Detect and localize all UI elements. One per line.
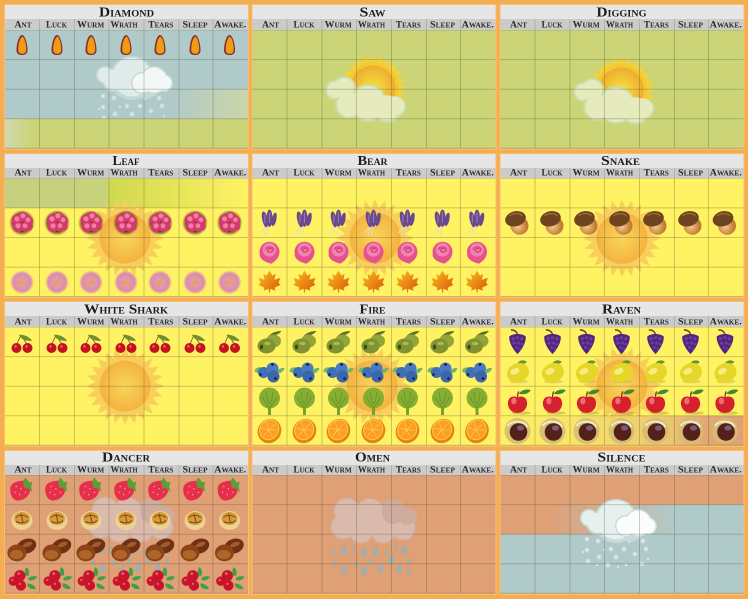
column headers: Tears bbox=[148, 169, 173, 179]
panel background: yellow bbox=[252, 178, 496, 297]
column headers: Wurm bbox=[325, 169, 352, 179]
icon: sun behind cloud bbox=[325, 54, 407, 123]
panel background: yellow with green band bbox=[5, 178, 248, 297]
column headers bbox=[500, 465, 744, 475]
icon row: strawberries bbox=[10, 477, 240, 501]
column headers: Tears bbox=[396, 20, 421, 30]
column headers: Sleep bbox=[430, 465, 456, 475]
panel: Dancer bbox=[4, 450, 249, 595]
column headers: Sleep bbox=[678, 20, 704, 30]
column headers: Wrath bbox=[606, 465, 633, 475]
column headers: Tears bbox=[396, 317, 421, 327]
column headers: Awake. bbox=[462, 465, 494, 475]
column headers: Wrath bbox=[110, 317, 138, 327]
panel background: blue to green bbox=[5, 30, 248, 120]
icon row: olives bbox=[258, 331, 489, 354]
panel background: yellow bbox=[500, 178, 744, 297]
title bbox=[5, 5, 248, 20]
panel: Silence bbox=[500, 450, 744, 595]
icon row: acorns bbox=[503, 209, 736, 235]
icon row: blueberries bbox=[254, 362, 492, 382]
column headers: Luck bbox=[542, 20, 563, 30]
icon row: cranberries bbox=[9, 567, 245, 591]
column headers: Tears bbox=[644, 20, 669, 30]
column headers: Luck bbox=[46, 317, 68, 327]
icon row: cherries bbox=[12, 335, 240, 353]
column headers: Awake. bbox=[462, 317, 494, 327]
title: Fire bbox=[360, 302, 386, 317]
column headers: Wurm bbox=[573, 317, 600, 327]
column headers: Wrath bbox=[110, 465, 138, 475]
column headers: Luck bbox=[294, 465, 315, 475]
column headers: Tears bbox=[396, 169, 421, 179]
column headers: Awake. bbox=[710, 317, 742, 327]
column headers: Wurm bbox=[77, 169, 105, 179]
icon row: maple leaves bbox=[258, 271, 488, 294]
panel: Leaf bbox=[4, 153, 249, 298]
title bbox=[500, 153, 744, 168]
column headers: Ant bbox=[262, 20, 279, 30]
column headers bbox=[252, 316, 496, 327]
icon: cloud with snow bbox=[96, 56, 173, 125]
column headers: Sleep bbox=[678, 465, 704, 475]
icon row: pale pink flowers bbox=[10, 270, 242, 294]
icon: sun bbox=[583, 199, 661, 277]
panel: Bear bbox=[252, 153, 496, 298]
column headers bbox=[5, 168, 248, 179]
column headers: Ant bbox=[262, 169, 279, 179]
season transition band bbox=[5, 89, 248, 148]
column headers bbox=[252, 168, 496, 179]
title: White Shark bbox=[84, 302, 168, 317]
column headers: Luck bbox=[294, 169, 315, 179]
icon: sun bbox=[86, 199, 164, 277]
column headers bbox=[252, 19, 496, 30]
column headers: Ant bbox=[262, 317, 279, 327]
title: Digging bbox=[596, 5, 646, 20]
panel background: green bbox=[252, 30, 496, 148]
column headers: Wrath bbox=[110, 20, 138, 30]
title bbox=[252, 153, 496, 168]
title bbox=[500, 450, 744, 465]
column headers: Luck bbox=[46, 465, 68, 475]
column headers: Luck bbox=[542, 465, 563, 475]
column headers: Ant bbox=[14, 465, 32, 475]
column headers: Wrath bbox=[606, 317, 633, 327]
column headers: Wurm bbox=[77, 317, 105, 327]
panel background: salmon bbox=[252, 475, 496, 593]
icon row: grapes bbox=[509, 330, 733, 354]
title bbox=[5, 450, 248, 465]
panel: Snake bbox=[500, 153, 744, 298]
panel: Saw bbox=[252, 4, 496, 150]
column headers: Ant bbox=[14, 317, 32, 327]
title: Dancer bbox=[102, 450, 151, 465]
column headers: Wurm bbox=[325, 20, 352, 30]
icon row: dark pink roses bbox=[9, 210, 242, 236]
icon row: chestnuts bbox=[504, 418, 738, 444]
column headers bbox=[500, 19, 744, 30]
column headers bbox=[500, 316, 744, 327]
icon row: lavender bbox=[260, 210, 485, 235]
column headers: Sleep bbox=[678, 317, 704, 327]
icon: sun bbox=[333, 347, 411, 425]
column headers: Wrath bbox=[358, 317, 385, 327]
column headers: Wurm bbox=[573, 465, 600, 475]
column headers: Awake. bbox=[710, 465, 742, 475]
panel: Fire bbox=[252, 301, 496, 448]
column headers: Wrath bbox=[606, 169, 633, 179]
title bbox=[252, 5, 496, 20]
column headers: Ant bbox=[510, 317, 527, 327]
icon: rain cloud bbox=[330, 498, 417, 575]
column headers: Awake. bbox=[462, 169, 494, 179]
column headers: Ant bbox=[14, 169, 32, 179]
column headers bbox=[5, 465, 248, 475]
column headers: Luck bbox=[46, 169, 68, 179]
column headers: Awake. bbox=[214, 465, 246, 475]
column headers: Sleep bbox=[182, 20, 208, 30]
panel: Digging bbox=[500, 4, 744, 150]
column headers bbox=[252, 465, 496, 475]
icon row: hazelnuts bbox=[7, 536, 246, 561]
title: Silence bbox=[598, 450, 646, 465]
column headers: Wurm bbox=[325, 317, 352, 327]
column headers: Ant bbox=[14, 20, 32, 30]
column headers: Sleep bbox=[678, 169, 704, 179]
icon row: artichokes bbox=[259, 388, 488, 415]
column headers: Wrath bbox=[110, 169, 138, 179]
column headers: Wrath bbox=[606, 20, 633, 30]
panel background: salmon to blue bbox=[500, 475, 744, 593]
title: Raven bbox=[602, 302, 642, 317]
icon row: amber drops bbox=[16, 35, 235, 55]
icon row: lemons bbox=[504, 360, 739, 386]
column headers: Tears bbox=[148, 317, 173, 327]
panel background: yellow bbox=[5, 327, 248, 445]
column headers: Awake. bbox=[710, 169, 742, 179]
icon: sun bbox=[583, 346, 661, 424]
panel: White Shark bbox=[4, 301, 249, 447]
panel background: green bbox=[500, 30, 744, 148]
column headers: Wurm bbox=[77, 465, 105, 475]
title bbox=[252, 302, 496, 317]
title bbox=[252, 450, 496, 465]
column headers: Tears bbox=[148, 465, 173, 475]
icon row: apples bbox=[508, 390, 738, 415]
column headers: Wurm bbox=[77, 20, 105, 30]
column headers: Tears bbox=[644, 465, 669, 475]
column headers: Luck bbox=[46, 20, 68, 30]
title: Bear bbox=[358, 153, 388, 168]
column headers: Awake. bbox=[710, 20, 742, 30]
title: Omen bbox=[355, 450, 391, 465]
column headers: Sleep bbox=[182, 317, 208, 327]
column headers: Wurm bbox=[573, 169, 600, 179]
column headers: Tears bbox=[644, 169, 669, 179]
panel: Diamond bbox=[4, 4, 249, 150]
title: Leaf bbox=[112, 153, 140, 168]
icon row: pink roses bbox=[260, 242, 487, 264]
title: Snake bbox=[601, 153, 640, 168]
column headers: Luck bbox=[294, 317, 315, 327]
title: Diamond bbox=[99, 5, 155, 20]
column headers: Wurm bbox=[573, 20, 600, 30]
column headers: Wurm bbox=[325, 465, 352, 475]
column headers: Sleep bbox=[430, 317, 456, 327]
column headers: Awake. bbox=[214, 317, 246, 327]
column headers: Sleep bbox=[430, 20, 456, 30]
panel background: salmon bbox=[5, 475, 248, 593]
column headers: Tears bbox=[396, 465, 421, 475]
panel background: yellow fading to salmon bbox=[500, 327, 744, 445]
column headers: Ant bbox=[510, 20, 527, 30]
column headers: Sleep bbox=[430, 169, 456, 179]
column headers bbox=[5, 316, 248, 327]
icon: rain cloud bbox=[88, 496, 175, 574]
column headers bbox=[500, 168, 744, 179]
column headers: Awake. bbox=[214, 169, 246, 179]
panel: Raven bbox=[500, 301, 744, 447]
icon row: orange slices bbox=[253, 414, 494, 448]
title bbox=[5, 302, 248, 317]
icon: sun bbox=[86, 347, 164, 425]
column headers: Wrath bbox=[358, 20, 385, 30]
panel: Omen bbox=[252, 450, 496, 595]
column headers: Tears bbox=[644, 317, 669, 327]
icon: sun behind cloud bbox=[573, 56, 655, 125]
column headers: Wrath bbox=[358, 169, 385, 179]
title bbox=[500, 302, 744, 317]
icon: cloud with snow bbox=[580, 499, 657, 568]
icon: sun bbox=[336, 199, 414, 277]
column headers: Ant bbox=[262, 465, 279, 475]
title: Saw bbox=[360, 5, 386, 20]
column headers: Luck bbox=[542, 317, 563, 327]
column headers: Luck bbox=[294, 20, 315, 30]
column headers: Sleep bbox=[182, 169, 208, 179]
column headers: Wrath bbox=[358, 465, 385, 475]
column headers: Luck bbox=[542, 169, 563, 179]
column headers: Ant bbox=[510, 169, 527, 179]
column headers: Awake. bbox=[214, 20, 246, 30]
title bbox=[5, 153, 248, 168]
column headers bbox=[5, 19, 248, 30]
column headers: Sleep bbox=[182, 465, 208, 475]
panel background: yellow bbox=[252, 327, 496, 445]
icon row: walnuts bbox=[12, 511, 240, 530]
column headers: Tears bbox=[148, 20, 173, 30]
title bbox=[500, 5, 744, 20]
column headers: Awake. bbox=[462, 20, 494, 30]
column headers: Ant bbox=[510, 465, 527, 475]
